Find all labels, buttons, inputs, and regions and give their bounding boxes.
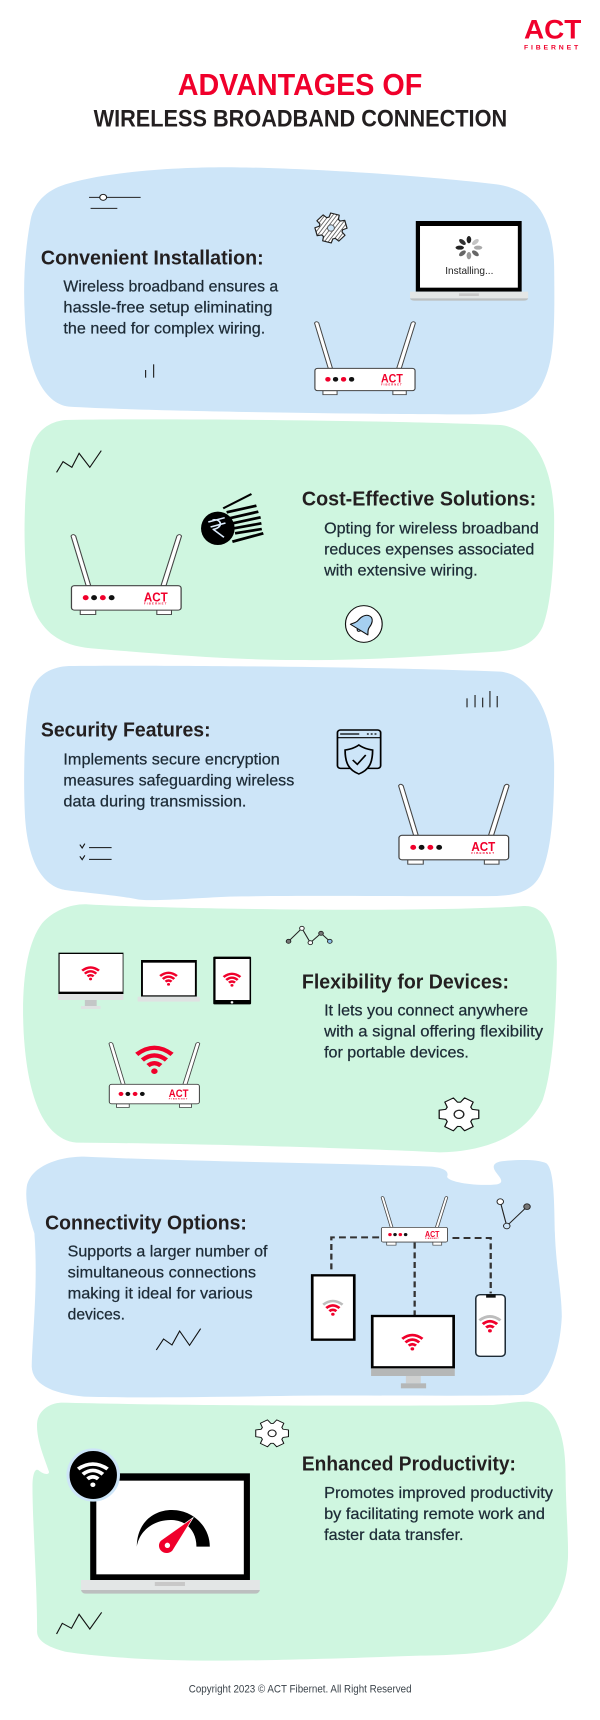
- title: [94, 68, 507, 132]
- icon: wifi signal: [137, 1048, 172, 1074]
- icon: rupee coin: [201, 494, 263, 545]
- icon: gear: [432, 1092, 486, 1137]
- icon: hatched gear: [314, 212, 348, 244]
- panel: Enhanced Productivity: [32, 1402, 568, 1695]
- heading: Enhanced Productivity:: [302, 1452, 516, 1475]
- heading: Cost-Effective Solutions:: [302, 487, 536, 510]
- icon: zigzag: [156, 1329, 201, 1350]
- panel: Connectivity Options: [26, 1157, 562, 1397]
- icon: router: [71, 535, 182, 614]
- heading: Convenient Installation:: [41, 246, 264, 269]
- body text: [63, 750, 294, 810]
- body text: Implements secure encryption: [63, 750, 280, 768]
- icon: laptop: [138, 960, 200, 1002]
- body text: [323, 1002, 544, 1061]
- panel: Convenient Installation: [24, 167, 554, 414]
- icon: router: FIBERNET: [169, 1098, 188, 1100]
- icon: laptop installing: Installing...: [445, 266, 493, 277]
- heading: Connectivity Options:: [45, 1211, 247, 1234]
- body text: It lets you connect anywhere: [324, 1002, 528, 1019]
- icon: router: ACT: [144, 589, 168, 604]
- icon: router: [399, 784, 509, 864]
- body text: by facilitating remote work and: [324, 1505, 545, 1523]
- body text: with a signal offering flexibility: [323, 1023, 544, 1040]
- logo: ACT Fibernet: ACT: [524, 15, 582, 45]
- body text: simultaneous connections: [68, 1264, 256, 1281]
- body text: Opting for wireless broadband: [324, 519, 539, 537]
- icon: laptop installing: [410, 221, 528, 301]
- panel: Security Features: [24, 666, 554, 900]
- icon: dashed network lines: [331, 1237, 491, 1315]
- icon: router: ACT: [471, 839, 496, 854]
- body text: hassle-free setup eliminating: [63, 299, 272, 316]
- icon: zigzag: [57, 1612, 102, 1634]
- icon: phone: [476, 1294, 505, 1356]
- icon: router: FIBERNET: [144, 601, 167, 605]
- heading: Security Features:: [41, 718, 211, 741]
- icon: line chart dots: [286, 926, 332, 945]
- icon: slider: [89, 194, 141, 208]
- panel: Cost-Effective Solutions: [25, 419, 554, 660]
- body text: Promotes improved productivity: [324, 1484, 554, 1502]
- body text: devices.: [68, 1306, 125, 1323]
- panel: Flexibility for Devices: [23, 904, 557, 1152]
- body text: [323, 519, 539, 579]
- icon: checklist: [80, 844, 112, 860]
- icon: tablet: [213, 957, 251, 1004]
- body text: [63, 278, 279, 337]
- body text: Supports a larger number of: [68, 1243, 268, 1260]
- body text: [68, 1243, 268, 1323]
- body text: with extensive wiring.: [323, 561, 478, 579]
- body text: data during transmission.: [63, 792, 246, 810]
- icon: network nodes: [497, 1199, 530, 1229]
- logo: ACT Fibernet: FIBERNET: [524, 45, 578, 52]
- body text: faster data transfer.: [324, 1526, 464, 1544]
- icon: laptop speedometer: [81, 1473, 260, 1594]
- icon: router: [109, 1042, 200, 1107]
- body text: reduces expenses associated: [324, 540, 534, 558]
- body text: for portable devices.: [324, 1044, 469, 1061]
- body text: Wireless broadband ensures a: [63, 278, 279, 295]
- body text: making it ideal for various: [68, 1285, 253, 1302]
- body text: [324, 1484, 554, 1544]
- copyright: Copyright 2023 © ACT Fibernet. All Right Reserved: [189, 1684, 412, 1695]
- icon: router: FIBERNET: [471, 851, 494, 855]
- icon: router: FIBERNET: [425, 1238, 440, 1240]
- icon: wifi badge: [68, 1450, 118, 1500]
- icon: browser shield: [337, 730, 381, 774]
- icon: zigzag: [57, 451, 101, 472]
- icon: router: ACT: [425, 1229, 440, 1239]
- icon: router: ACT: [381, 372, 403, 385]
- icon: ticks: [146, 364, 154, 378]
- icon: tablet: [312, 1275, 354, 1340]
- icon: router: FIBERNET: [381, 383, 402, 386]
- icon: signal bars: [467, 691, 497, 707]
- icon: router: ACT: [169, 1088, 188, 1100]
- icon: desktop monitor: [371, 1316, 455, 1388]
- heading: Flexibility for Devices:: [302, 970, 509, 993]
- icon: bell: [345, 606, 382, 642]
- icon: desktop monitor: [58, 953, 123, 1009]
- icon: router: [381, 1197, 448, 1245]
- body text: the need for complex wiring.: [63, 320, 265, 337]
- icon: gear: [250, 1415, 294, 1452]
- icon: router: [315, 322, 415, 395]
- title: ADVANTAGES OF: [178, 68, 422, 102]
- body text: measures safeguarding wireless: [63, 771, 294, 789]
